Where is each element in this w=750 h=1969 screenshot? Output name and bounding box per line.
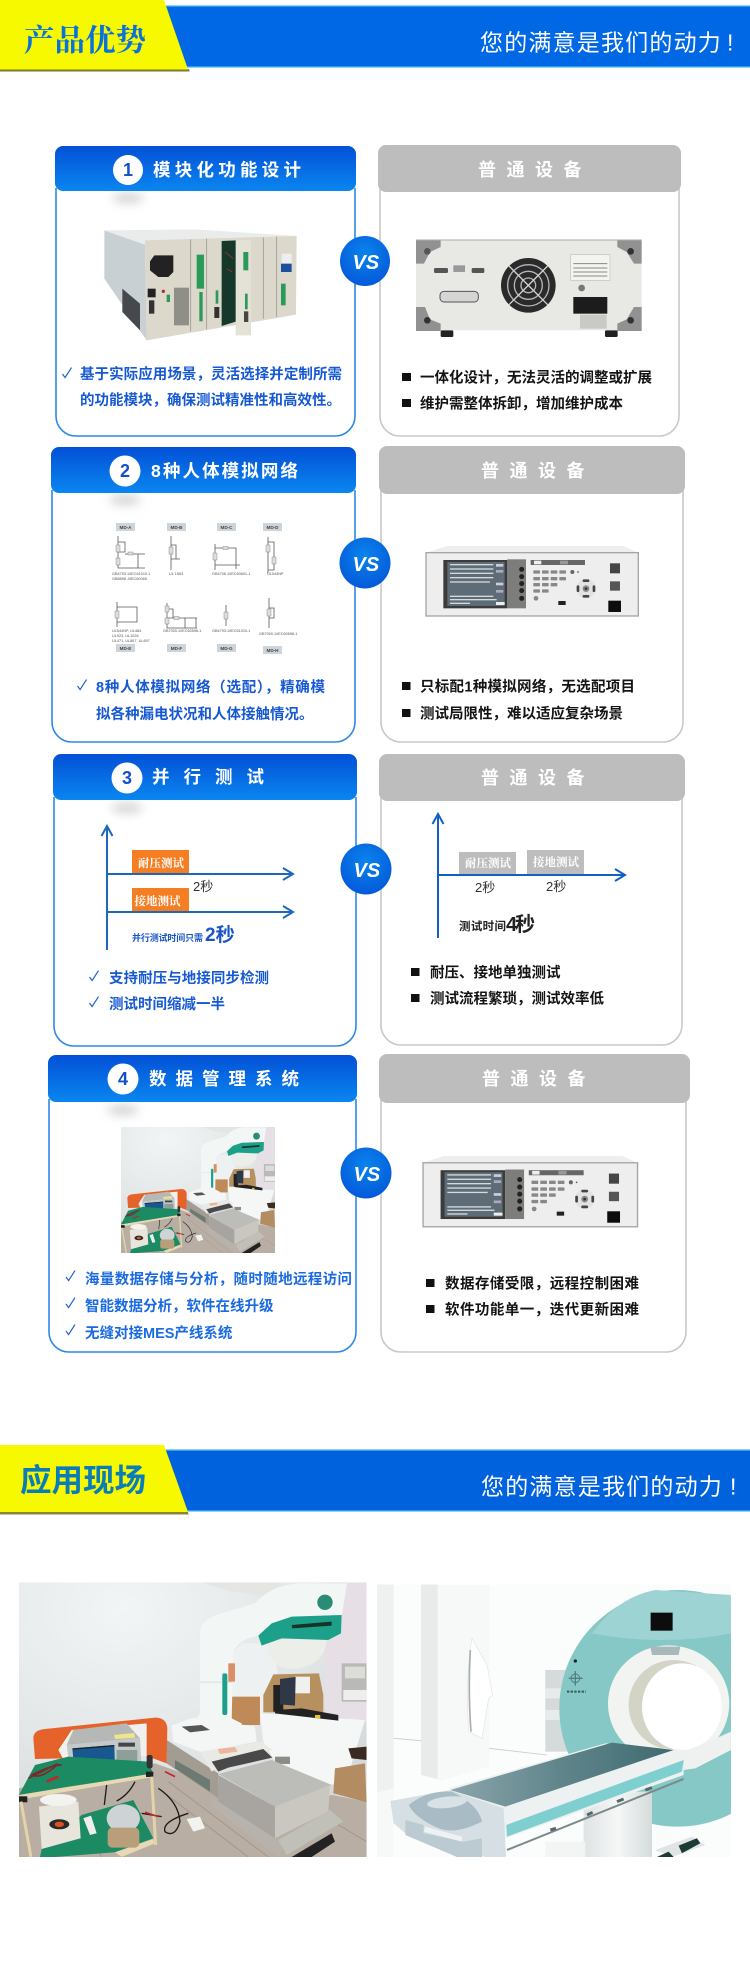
time arrow — [438, 869, 625, 881]
withstand test bar — [459, 852, 516, 875]
panel: feature 3 parallel testing — [53, 754, 357, 1046]
header banner: product advantages — [0, 0, 750, 72]
soft shadow below number — [107, 1105, 139, 1115]
list: drawbacks: 测试流程繁琐，测试效率低 — [430, 990, 604, 1008]
network MD-E: UL923, UL1026 — [112, 634, 139, 638]
list: advantages: 智能数据分析，软件在线升级 — [85, 1297, 274, 1315]
soft shadow below number — [109, 495, 141, 505]
panel title: 模块化功能设计 — [153, 160, 301, 180]
illustration: tester front — [423, 1156, 638, 1227]
panel title: 普通设备 — [482, 1069, 596, 1089]
chart: parallel test timeline — [102, 826, 293, 950]
list: drawbacks: 耐压、接地单独测试 — [430, 964, 561, 982]
total time note: 测试时间 — [459, 919, 506, 933]
list: drawbacks — [411, 964, 604, 1008]
illustration: tester front — [426, 546, 638, 616]
duration labels: 2秒 — [475, 880, 495, 895]
number badge 3: 3 — [122, 768, 132, 788]
network MD-E: UL471, UL867, UL697 — [112, 639, 150, 643]
network MD-D — [263, 523, 284, 576]
list: drawbacks — [426, 1274, 640, 1318]
total time note: 并行测试时间只需 — [132, 932, 203, 943]
panel title: 并行测试 — [152, 767, 264, 787]
vertical axis — [102, 826, 112, 950]
panel title: 普通设备 — [478, 160, 592, 180]
network MD-H: MD-H — [266, 648, 279, 653]
network MD-A: GB8898 J/IEC60065 — [112, 577, 147, 581]
list: drawbacks: 维护需整体拆卸，增加维护成本 — [420, 394, 623, 412]
list: drawbacks: 一体化设计，无法灵活的调整或扩展 — [420, 368, 652, 386]
VS badge 1 — [340, 236, 390, 286]
list: advantages: 测试时间缩减一半 — [109, 995, 225, 1013]
list: advantages — [78, 678, 326, 723]
list: advantages — [90, 969, 269, 1013]
VS badge 2: VS — [352, 554, 380, 576]
VS badge 4 — [340, 1148, 392, 1198]
panel: feature 4 data management — [48, 1055, 357, 1352]
network MD-H — [259, 598, 297, 654]
network MD-G: GB4793.1/IEC61010-1 — [212, 629, 250, 633]
panel: feature 1 modular design — [55, 146, 356, 436]
network MD-G — [212, 605, 250, 652]
list: drawbacks — [402, 678, 635, 722]
tagline: ! — [730, 1474, 738, 1500]
list: advantages: 无缝对接MES产线系统 — [85, 1324, 233, 1342]
network MD-G: MD-G — [220, 646, 233, 651]
panel header — [55, 146, 356, 191]
number badge 1 — [113, 155, 143, 185]
number badge 2: 2 — [120, 461, 130, 481]
duration labels — [475, 879, 566, 895]
header banner: application sites — [0, 1445, 750, 1514]
network MD-F: GB7000.1/IEC60598-1 — [163, 629, 201, 633]
VS badge 2 — [340, 538, 390, 588]
chart: eight network circuit diagrams — [112, 523, 297, 654]
total time note — [459, 913, 535, 936]
network MD-A: GB4793.1/IEC61010-1 — [112, 572, 150, 576]
illustration: modular chassis — [104, 229, 297, 340]
list: advantages — [66, 1270, 352, 1342]
network MD-C: MD-C — [220, 525, 233, 530]
panel header — [379, 446, 685, 494]
chart: sequential test timeline — [432, 814, 625, 938]
panel: ordinary device 2 — [379, 446, 685, 742]
withstand test bar — [132, 850, 189, 874]
list: advantages: 的功能模块，确保测试精准性和高效性。 — [80, 391, 341, 409]
time arrow 2 — [107, 906, 293, 918]
tagline: ! — [727, 30, 735, 56]
network MD-B: MD-B — [170, 525, 183, 530]
vertical axis — [432, 814, 444, 938]
number badge 4: 4 — [118, 1069, 128, 1089]
list: advantages: 基于实际应用场景，灵活选择并定制所需 — [80, 365, 342, 383]
withstand test bar: 耐压测试 — [465, 856, 511, 870]
number badge 1: 1 — [123, 160, 133, 180]
list: drawbacks — [402, 368, 652, 412]
network MD-E — [112, 602, 150, 652]
panel header — [379, 754, 685, 801]
duration label: 2秒 — [193, 879, 213, 894]
soft shadow below number — [112, 193, 144, 203]
duration labels: 2秒 — [546, 879, 566, 894]
total time note: 2秒 — [205, 924, 235, 946]
time arrow 1 — [107, 868, 293, 880]
list: advantages: 支持耐压与地接同步检测 — [109, 969, 269, 987]
network MD-B: UL 1563 — [169, 572, 183, 576]
network MD-E: MD-E — [120, 646, 131, 651]
panel title: 普通设备 — [481, 768, 595, 788]
VS badge 3 — [340, 844, 392, 894]
list: drawbacks: 只标配1种模拟网络，无选配项目 — [420, 678, 635, 696]
ground test bar — [527, 850, 584, 874]
VS badge 1: VS — [352, 252, 380, 274]
number badge 2 — [110, 456, 140, 486]
network MD-A — [112, 523, 150, 581]
heading: application sites: 应用现场 — [20, 1462, 146, 1498]
network MD-D: UL544NP — [267, 572, 284, 576]
network MD-E: UL544NP, UL484 — [112, 629, 141, 633]
network MD-H: GB7000.1/IEC60598-1 — [259, 632, 297, 636]
number badge 3 — [112, 762, 142, 794]
list: drawbacks: 数据存储受限，远程控制困难 — [445, 1274, 640, 1292]
network MD-F: MD-F — [171, 646, 182, 651]
panel: feature 2 body simulation networks — [51, 447, 356, 742]
panel header — [48, 1055, 357, 1102]
illustration: device rear — [416, 239, 642, 337]
soft shadow below number — [111, 803, 143, 813]
ground test bar: 接地测试 — [134, 894, 181, 908]
VS badge 3: VS — [354, 860, 381, 882]
network MD-A: MD-A — [120, 525, 132, 530]
panel: ordinary device 1 — [378, 145, 681, 436]
network MD-D: MD-D — [266, 525, 279, 530]
total time note — [132, 924, 235, 946]
withstand test bar: 耐压测试 — [138, 856, 184, 870]
list: drawbacks: 测试局限性，难以适应复杂场景 — [420, 704, 623, 722]
list: advantages: 拟各种漏电状况和人体接触情况。 — [96, 705, 314, 723]
panel title: 普通设备 — [481, 461, 595, 481]
ground test bar — [132, 888, 189, 912]
heading: product advantages: 产品优势 — [24, 24, 146, 58]
number badge 4 — [108, 1064, 138, 1094]
tagline: 您的满意是我们的动力 — [481, 1474, 723, 1500]
list: advantages — [62, 365, 342, 409]
panel header — [379, 1054, 690, 1103]
panel title: 数据管理系统 — [149, 1069, 300, 1089]
list: advantages: 8种人体模拟网络（选配），精确模 — [96, 678, 326, 696]
network MD-C: GB4706.1/IEC60601-1 — [212, 572, 250, 576]
panel: ordinary device 4 — [379, 1054, 690, 1352]
total time note: 4秒 — [506, 913, 535, 936]
ground test bar: 接地测试 — [533, 855, 579, 869]
network MD-C — [212, 523, 250, 576]
tagline: 您的满意是我们的动力 — [480, 30, 722, 56]
photo: CT scanner — [377, 1584, 750, 1857]
list: drawbacks: 软件功能单一，迭代更新困难 — [445, 1300, 640, 1318]
VS badge 4: VS — [354, 1164, 381, 1186]
list: advantages: 海量数据存储与分析，随时随地远程访问 — [85, 1270, 352, 1288]
photo: mammography machine test site — [19, 1582, 367, 1857]
panel title: 8种人体模拟网络 — [151, 461, 298, 481]
network MD-B — [167, 523, 186, 576]
network MD-F — [163, 603, 201, 652]
panel header — [378, 145, 681, 192]
panel header — [53, 754, 357, 800]
panel header — [51, 447, 356, 493]
panel: ordinary device 3 — [379, 754, 685, 1045]
photo: test site thumbnail — [121, 1127, 275, 1253]
